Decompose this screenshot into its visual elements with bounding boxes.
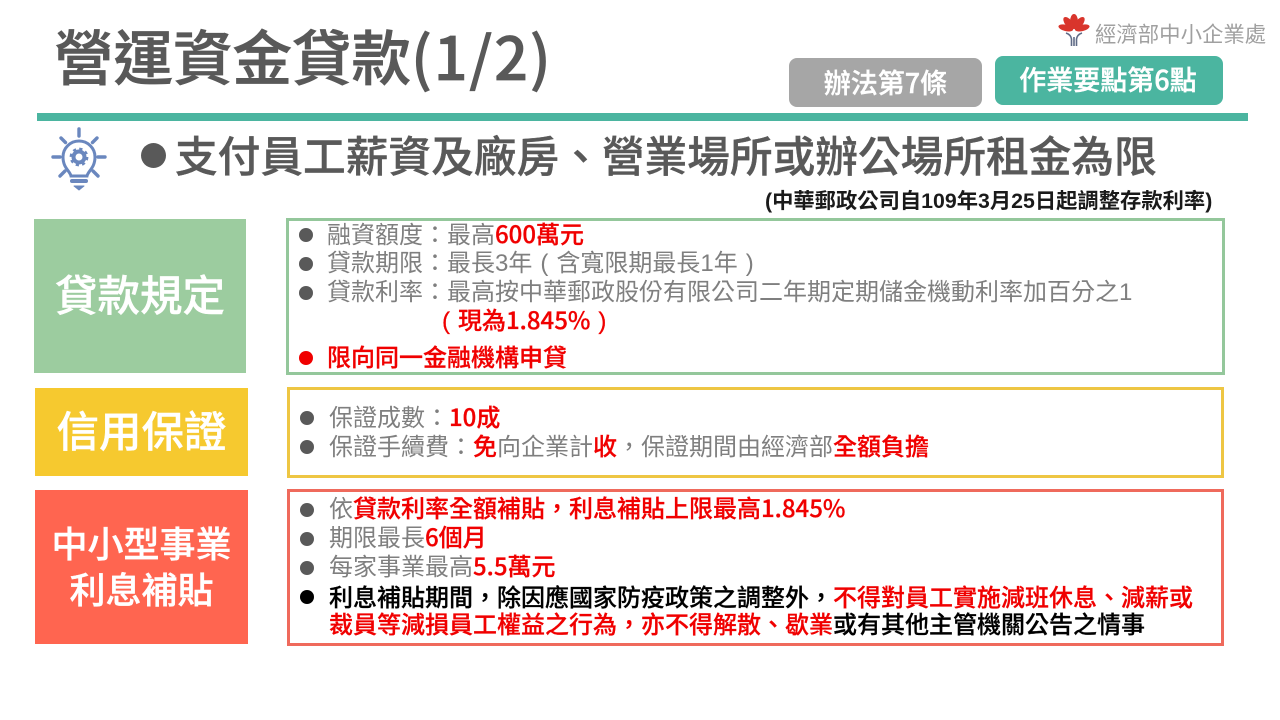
logo: ministry agency — [1058, 14, 1266, 47]
icon: red flower with hands — [1058, 14, 1090, 46]
bullet — [300, 411, 314, 425]
note: postal rate adjustment: (中華郵政公司自109年3月25日起調整存款利率) — [765, 189, 1212, 213]
rule: current rate: ( — [442, 308, 450, 335]
label: credit guarantee — [35, 388, 248, 476]
subsidy term: 期限最長6個月 — [329, 518, 487, 553]
label: loan rules — [34, 219, 246, 373]
condition line 2: 裁員等減損員工權益之行為，亦不得解散、歇業或有其他主管機關公告之情事 — [329, 605, 1145, 640]
button: article 7: 辦法第7條 — [824, 62, 947, 101]
guarantee ratio: 保證成數：10成 — [329, 398, 500, 433]
rule: term: 貸款期限：最長3年 含寬限期最長1年 — [327, 250, 738, 277]
bullet — [300, 440, 314, 454]
title: 營運資金貸款(1/2) — [54, 12, 552, 98]
button: point 6 — [995, 56, 1223, 105]
panel: loan rules — [286, 218, 1225, 375]
logo text: 經濟部中小企業處 — [1095, 23, 1266, 47]
bullet — [300, 503, 314, 517]
label: SME interest subsidy: 中小型事業 — [51, 516, 232, 568]
bullet — [300, 532, 314, 546]
rule: single institution: 限向同一金融機構申貸 — [327, 338, 567, 373]
label: SME interest subsidy: 利息補貼 — [69, 562, 214, 614]
label: SME interest subsidy — [35, 490, 248, 644]
subsidy rate: 依貸款利率全額補貼，利息補貼上限最高1.845% — [329, 489, 845, 524]
rule: current rate: 現為1.845% — [458, 301, 590, 336]
label: loan rules: 貸款規定 — [55, 263, 225, 324]
subtitle bullet — [141, 143, 166, 168]
panel: SME interest subsidy — [287, 489, 1224, 646]
button: article 7 — [789, 58, 982, 107]
rule: current rate: ) — [598, 308, 606, 335]
panel: credit guarantee — [287, 387, 1224, 478]
bullet — [299, 228, 313, 242]
subsidy cap: 每家事業最高5.5萬元 — [329, 547, 556, 582]
bullet — [300, 561, 314, 575]
rule: term: ) — [746, 250, 754, 277]
label: credit guarantee: 信用保證 — [56, 399, 226, 460]
rule: amount: 融資額度：最高600萬元 — [327, 215, 584, 250]
black bullet — [300, 590, 314, 604]
button: point 6: 作業要點第6點 — [1019, 59, 1197, 98]
rule: rate: 貸款利率：最高按中華郵政股份有限公司二年期定期儲金機動利率加百分之1 — [327, 279, 1132, 306]
rule: term: ( — [540, 250, 548, 277]
header rule — [37, 113, 1248, 121]
bullet — [299, 286, 313, 300]
subtitle: 支付員工薪資及廠房、營業場所或辦公場所租金為限 — [175, 123, 1157, 185]
condition line 1: 利息補貼期間，除因應國家防疫政策之調整外，不得對員工實施減班休息、減薪或 — [329, 578, 1193, 613]
red bullet — [299, 351, 313, 365]
guarantee fee: 保證手續費：免向企業計收，保證期間由經濟部全額負擔 — [329, 427, 929, 462]
icon: light bulb with gear — [51, 127, 107, 190]
bullet — [299, 257, 313, 271]
